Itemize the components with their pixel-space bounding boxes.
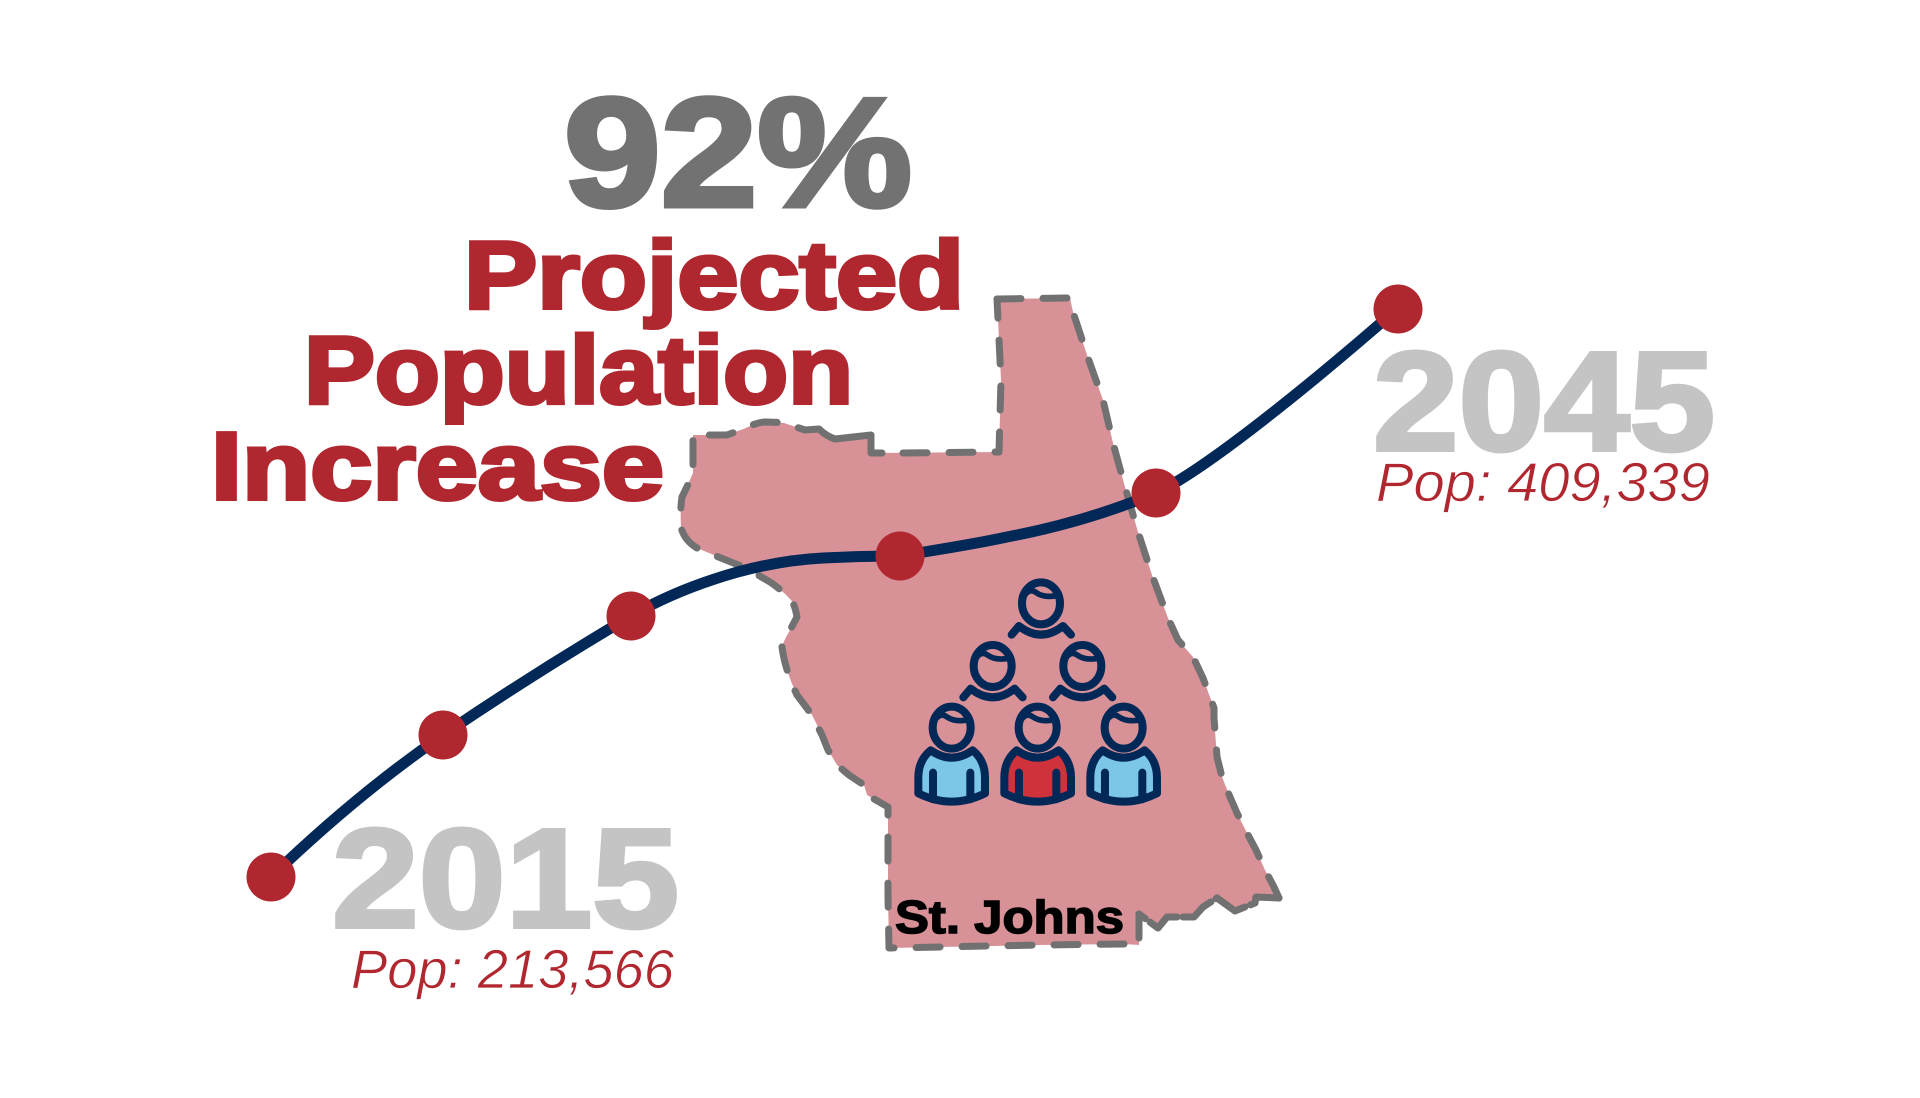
- county label: St. Johns: St. Johns: [895, 891, 1124, 943]
- population label: 2045: Pop: 409,339: [1376, 451, 1710, 513]
- icon: person middle left: [963, 645, 1023, 697]
- population label: 2015: Pop: 213,566: [351, 938, 674, 1000]
- heading: Projected Population Increase: Increase: [211, 413, 664, 520]
- heading: Projected Population Increase: [211, 222, 964, 520]
- icon: group of six people: [918, 582, 1157, 802]
- icon: person top: [1012, 582, 1071, 635]
- population trend line: [271, 309, 1397, 877]
- map: St. Johns county: [681, 298, 1279, 948]
- heading: Projected Population Increase: Projected: [464, 222, 964, 329]
- trend line data points: [246, 284, 1422, 902]
- icon: person bottom right, blue shirt: [1090, 707, 1157, 802]
- heading: Projected Population Increase: Population: [304, 317, 853, 424]
- year label: 2045: 2045: [1373, 322, 1715, 480]
- year label: 2015: 2015: [332, 799, 679, 957]
- icon: person bottom left, blue shirt: [918, 707, 985, 802]
- icon: person middle right: [1053, 645, 1112, 697]
- headline: 92%: 92%: [564, 66, 912, 239]
- icon: person bottom centre, red shirt: [1004, 707, 1071, 802]
